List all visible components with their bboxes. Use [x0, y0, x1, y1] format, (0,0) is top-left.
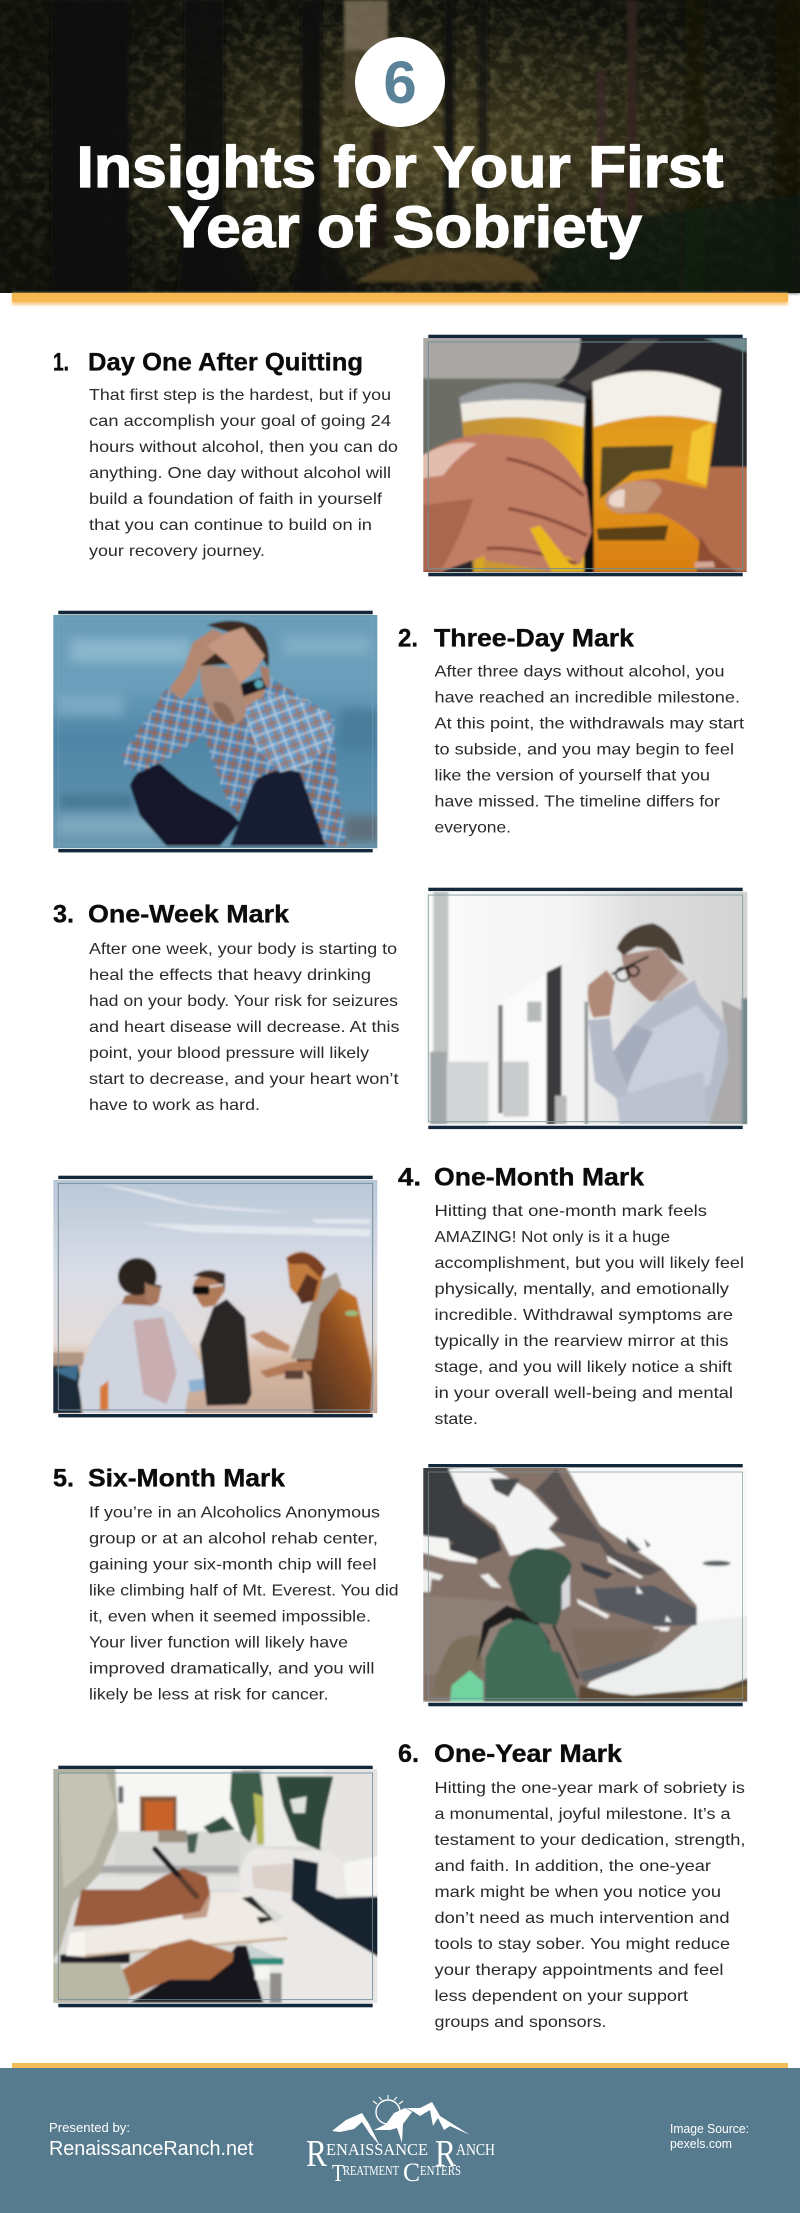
text block: step 6: less dependent on your support: [434, 1988, 689, 2005]
orange header rule: [12, 293, 788, 305]
heading: step 2: 2.: [398, 624, 418, 652]
logo: Renaissance Ranch Treatment Centers: ENAISSANCE: [326, 2140, 428, 2159]
text block: step 2: everyone.: [434, 819, 511, 836]
text block: step 5: like climbing half of Mt. Everest. You did: [89, 1582, 398, 1599]
text block: step 2: like the version of yourself that you: [434, 767, 710, 784]
heading: step 4: One-Month Mark: [434, 1163, 644, 1191]
text block: step 1: your recovery journey.: [89, 543, 265, 560]
text block: step 5: it, even when it seemed impossible.: [89, 1608, 371, 1625]
text block: step 6: a monumental, joyful milestone. It’s a: [434, 1806, 731, 1823]
heading: step 2: Three-Day Mark: [434, 624, 634, 652]
text block: step 3: had on your body. Your risk for seizures: [89, 993, 398, 1010]
text block: step 5: likely be less at risk for cancer.: [89, 1686, 328, 1703]
heading: step 6: 6.: [398, 1740, 419, 1768]
text block: step 2: After three days without alcohol, you: [434, 663, 724, 680]
heading: step 1: Day One After Quitting: [88, 349, 363, 377]
photo: hiker in green hood facing snowy mountain: [420, 1462, 753, 1709]
heading: step 4: 4.: [398, 1163, 421, 1191]
logo: Renaissance Ranch Treatment Centers: R: [435, 2133, 457, 2175]
text block: step 6: your therapy appointments and feel: [434, 1962, 724, 1979]
text block: step 6: don’t need as much intervention and: [434, 1910, 730, 1927]
logo: Renaissance Ranch Treatment Centers: [306, 2095, 495, 2187]
text block: step 6: testament to your dedication, strength,: [434, 1832, 746, 1849]
panel: step 4 one-month: [50, 1163, 744, 1428]
logo: Renaissance Ranch Treatment Centers: ANCH: [456, 2140, 495, 2159]
number badge: 6: [355, 37, 445, 127]
text block: step 2: have missed. The timeline differs for: [434, 793, 721, 810]
heading: step 1: 1.: [53, 349, 69, 377]
heading: step 3: 3.: [53, 900, 74, 928]
text block: step 2: have reached an incredible milestone.: [434, 689, 740, 706]
text block: step 1: [89, 387, 398, 560]
footer band: [0, 2068, 800, 2213]
photo: man with glasses leaning on wall: [420, 885, 753, 1132]
heading: step 6: One-Year Mark: [434, 1740, 622, 1768]
logo: Renaissance Ranch Treatment Centers: R: [306, 2133, 328, 2175]
title: Insights for Your First: [76, 135, 724, 200]
text block: step 3: start to decrease, and your heart won’t: [89, 1071, 399, 1088]
text block: step 4: stage, and you will likely notice a shift: [434, 1359, 733, 1376]
text block: step 5: improved dramatically, and you will: [89, 1660, 374, 1677]
text block: step 4: physically, mentally, and emotionally: [434, 1281, 729, 1298]
text block: step 5: [89, 1504, 398, 1703]
heading: step 3: One-Week Mark: [88, 900, 289, 928]
text block: step 1: that you can continue to build on in: [89, 517, 372, 534]
text block: step 5: gaining your six-month chip will feel: [89, 1556, 376, 1573]
text block: step 6: [434, 1780, 746, 2031]
image source credit: [670, 2121, 749, 2151]
text block: step 3: point, your blood pressure will likely: [89, 1045, 369, 1062]
photo: person writing on a clipboard: [50, 1763, 383, 2010]
text block: step 4: incredible. Withdrawal symptoms are: [434, 1307, 733, 1324]
text block: step 2: At this point, the withdrawals may start: [434, 715, 745, 732]
text block: step 1: build a foundation of faith in yourself: [89, 491, 383, 508]
text block: step 3: [89, 941, 400, 1114]
panel: step 2 three-day: [50, 609, 745, 856]
photo: two hands clinking beer glasses: [420, 332, 753, 579]
text block: step 3: have to work as hard.: [89, 1097, 260, 1114]
text block: step 1: hours without alcohol, then you can do: [89, 439, 398, 456]
text block: step 5: Your liver function will likely have: [89, 1634, 348, 1651]
logo: Renaissance Ranch Treatment Centers: ENTERS: [420, 2163, 461, 2178]
text block: step 3: heal the effects that heavy drinking: [89, 967, 371, 984]
text block: step 6: mark might be when you notice you: [434, 1884, 721, 1901]
image source credit: pexels.com: [670, 2136, 732, 2151]
presenter credit: Presented by:: [49, 2120, 130, 2135]
text block: step 6: and faith. In addition, the one-year: [434, 1858, 712, 1875]
panel: step 6 one-year: [50, 1740, 745, 2031]
heading: step 5: Six-Month Mark: [88, 1465, 285, 1493]
text block: step 4: in your overall well-being and mental: [434, 1385, 733, 1402]
orange footer rule: [12, 2063, 788, 2068]
logo: Renaissance Ranch Treatment Centers: C: [403, 2158, 420, 2187]
header banner with forest photo: [0, 0, 800, 293]
panel: step 1 day one: [53, 332, 753, 579]
heading: step 5: 5.: [53, 1465, 74, 1493]
panel: step 5 six-month: [53, 1462, 753, 1709]
photo: distressed man holding his head: [50, 609, 383, 856]
panel: step 3 one-week: [53, 885, 753, 1132]
text block: step 2: to subside, and you may begin to feel: [434, 741, 734, 758]
icon: sun over mountains: [332, 2095, 470, 2146]
text block: step 2: [434, 663, 745, 836]
text block: step 4: Hitting that one-month mark feels: [434, 1203, 707, 1220]
text block: step 5: group or at an alcohol rehab center,: [89, 1530, 378, 1547]
photo: three men talking at sunset: [50, 1174, 383, 1421]
text block: step 5: If you’re in an Alcoholics Anonymous: [89, 1504, 380, 1521]
text block: step 3: After one week, your body is starting to: [89, 941, 397, 958]
text block: step 6: Hitting the one-year mark of sobriety is: [434, 1780, 745, 1797]
text block: step 4: AMAZING! Not only is it a huge: [434, 1229, 670, 1246]
text block: step 4: accomplishment, but you will likely feel: [434, 1255, 744, 1272]
text block: step 1: That first step is the hardest, but if you: [89, 387, 391, 404]
text block: step 6: groups and sponsors.: [434, 2014, 606, 2031]
presenter credit: [49, 2120, 254, 2160]
text block: step 1: can accomplish your goal of going 24: [89, 413, 391, 430]
title: [76, 135, 724, 260]
text block: step 4: typically in the rearview mirror at this: [434, 1333, 728, 1350]
text block: step 1: anything. One day without alcohol will: [89, 465, 391, 482]
presenter credit: RenaissanceRanch.net: [49, 2138, 254, 2160]
title: Year of Sobriety: [168, 195, 642, 260]
text block: step 6: tools to stay sober. You might reduce: [434, 1936, 730, 1953]
number badge: 6: 6: [383, 49, 417, 116]
logo: Renaissance Ranch Treatment Centers: REATMENT: [343, 2163, 400, 2178]
text block: step 3: and heart disease will decrease. At this: [89, 1019, 400, 1036]
text block: step 4: state.: [434, 1411, 478, 1428]
image source credit: Image Source:: [670, 2121, 749, 2136]
logo: Renaissance Ranch Treatment Centers: T: [332, 2161, 344, 2187]
text block: step 4: [434, 1203, 744, 1428]
